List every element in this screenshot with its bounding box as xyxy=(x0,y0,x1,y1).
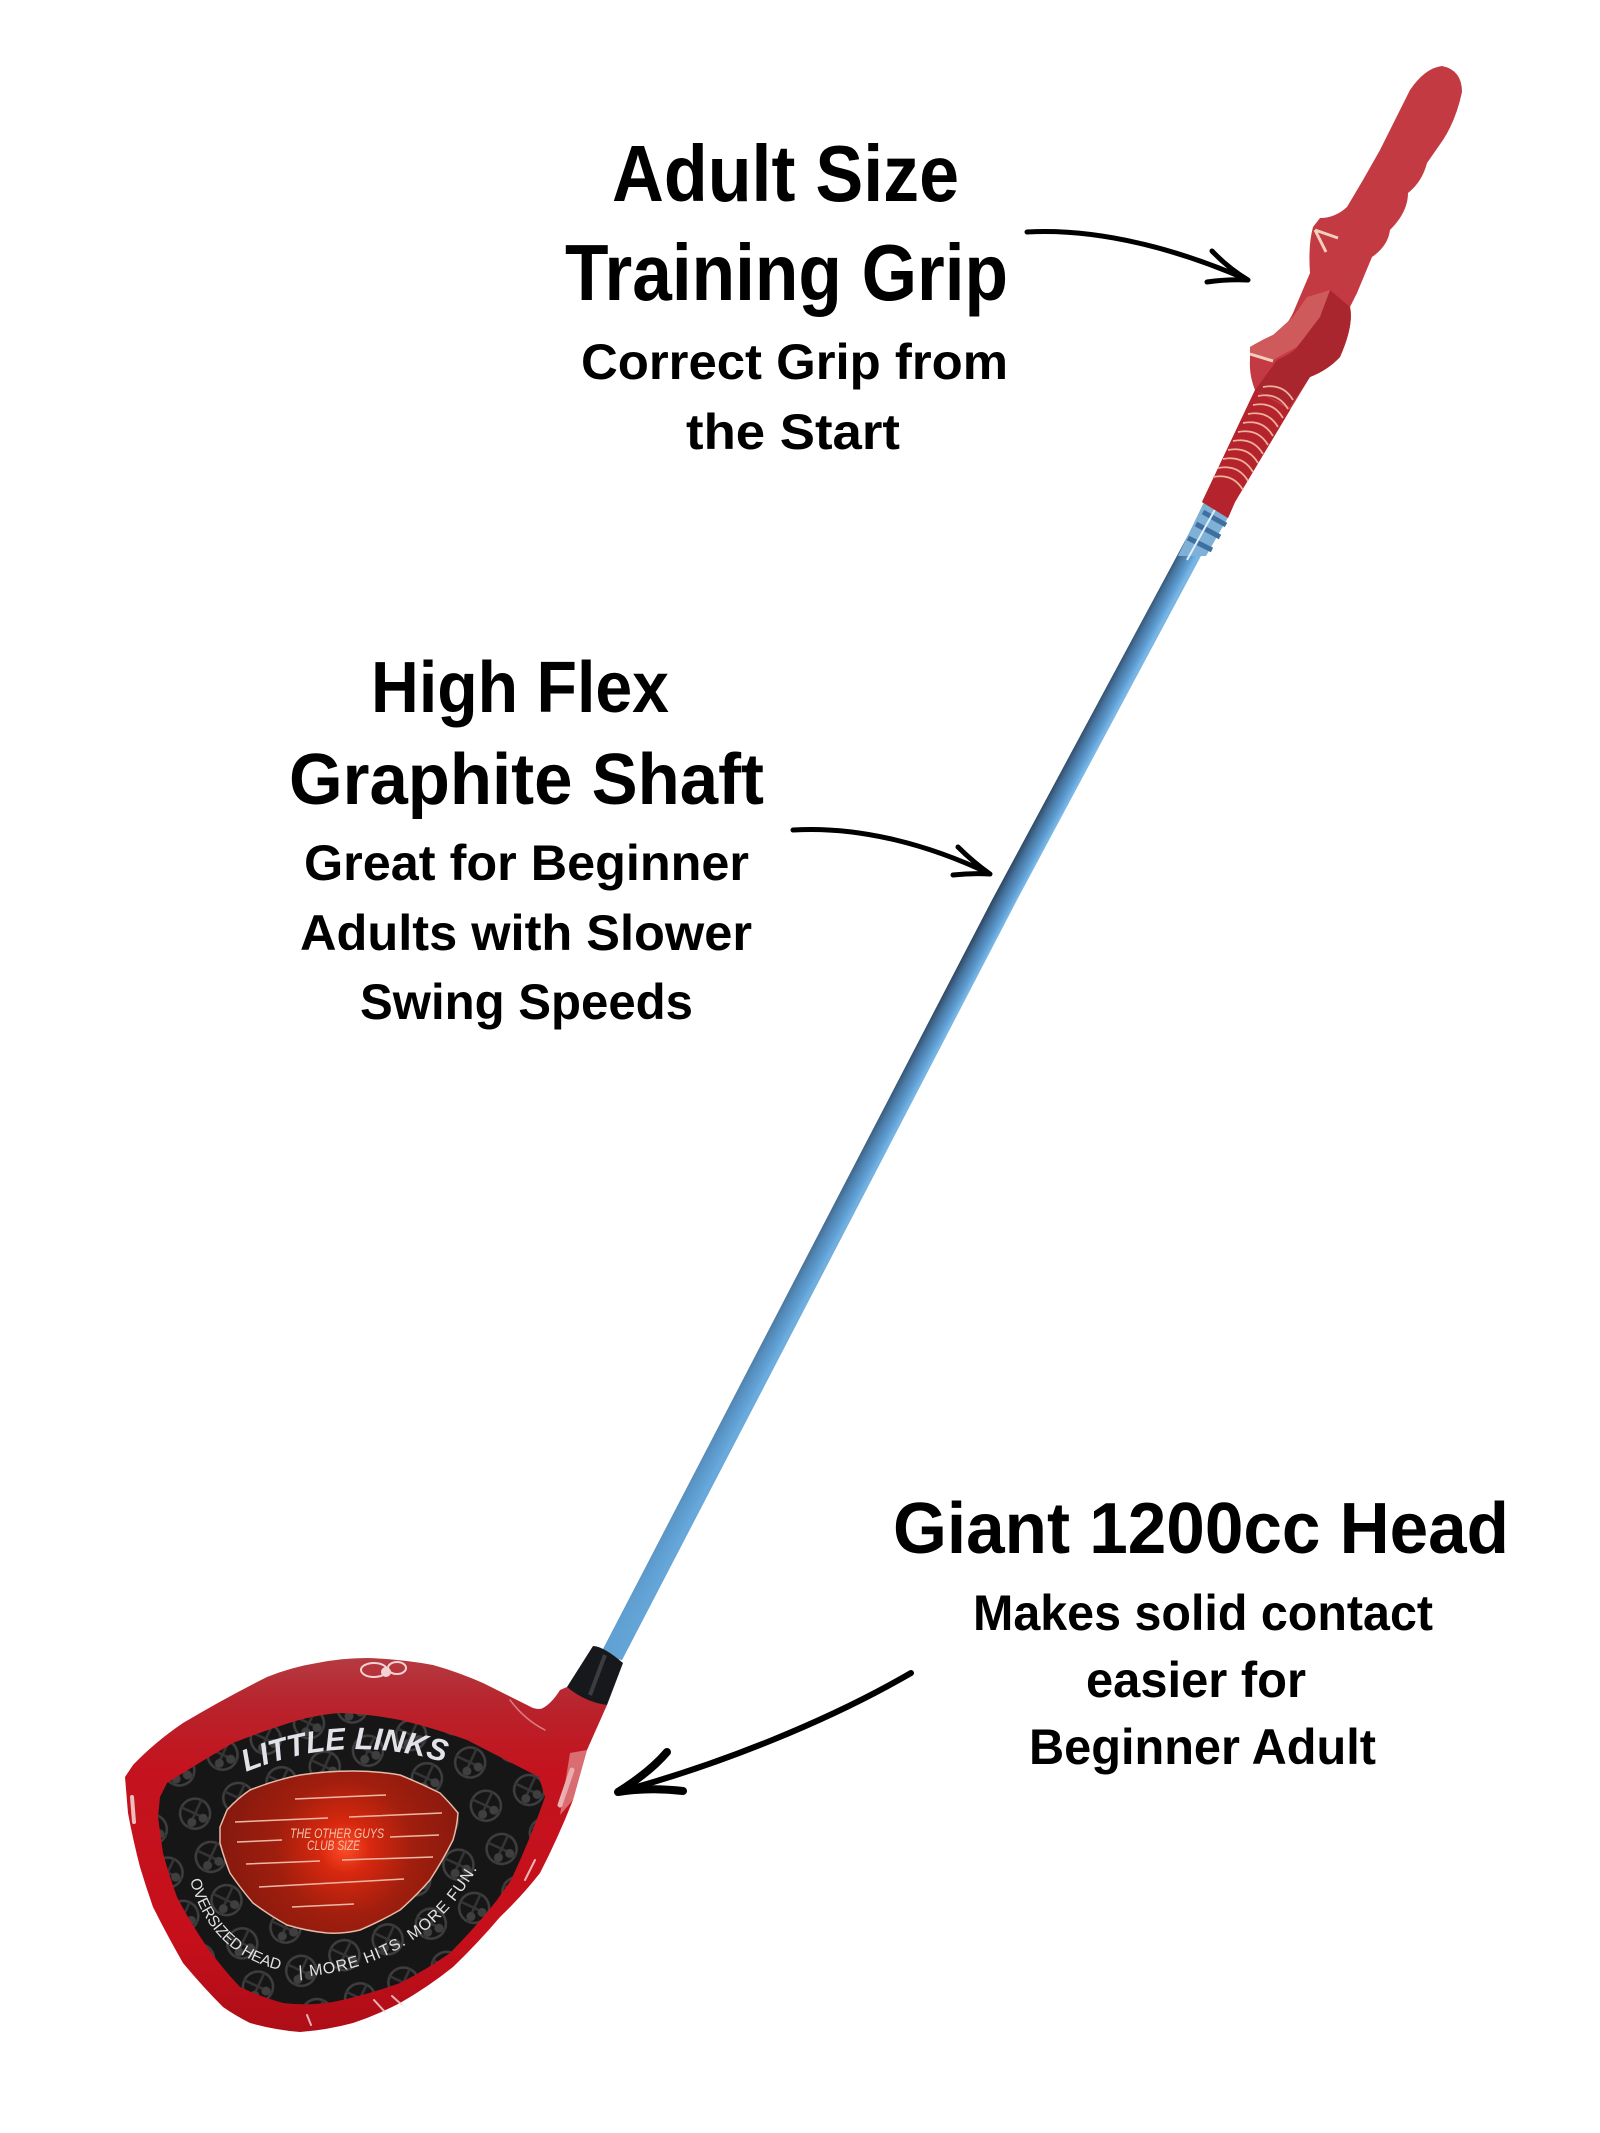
callout: Giant 1200cc Head: Makes solid contact xyxy=(973,1585,1433,1641)
callout: Adult Size Training Grip: Training Grip xyxy=(565,228,1008,317)
callout: Adult Size Training Grip: the Start xyxy=(686,404,900,460)
red window: CLUB SIZE xyxy=(307,1837,360,1853)
club head xyxy=(125,1658,607,2032)
callout: High Flex Graphite Shaft: Graphite Shaft xyxy=(289,740,764,820)
text: MORE HITS: | MORE HITS. MORE FUN. xyxy=(300,1868,476,1980)
callout: High Flex Graphite Shaft: High Flex xyxy=(371,648,669,728)
callout: Giant 1200cc Head: Giant 1200cc Head xyxy=(893,1489,1509,1569)
label panel xyxy=(158,1713,545,2004)
callout: Giant 1200cc Head xyxy=(893,1489,1509,1775)
hosel ferrule xyxy=(567,1646,623,1705)
arrow to shaft xyxy=(793,829,990,875)
icon: logo xyxy=(361,1662,406,1677)
training grip xyxy=(1202,66,1462,518)
arrow to head xyxy=(618,1673,911,1792)
callout: High Flex Graphite Shaft: Swing Speeds xyxy=(360,974,693,1030)
callout: High Flex Graphite Shaft: Great for Beginner xyxy=(304,835,749,891)
callout: Adult Size Training Grip: Correct Grip from xyxy=(581,334,1008,390)
pale neck highlight xyxy=(560,1750,587,1815)
text: OVERSIZED HEAD: OVERSIZED HEAD xyxy=(191,1878,281,1969)
text: LITTLE LINKS: LITTLE LINKS xyxy=(242,1728,449,1772)
arrowhead to head xyxy=(618,1752,683,1792)
plastic wrap highlights xyxy=(132,1700,572,2025)
red window xyxy=(220,1771,458,1933)
callout: Giant 1200cc Head: Beginner Adult xyxy=(1029,1719,1376,1775)
callout: Adult Size Training Grip xyxy=(565,129,1008,460)
red window: THE OTHER GUYS xyxy=(290,1825,384,1841)
arrow to grip xyxy=(1027,232,1248,282)
callout: High Flex Graphite Shaft xyxy=(289,648,764,1030)
shaft xyxy=(600,497,1232,1660)
callout: Adult Size Training Grip: Adult Size xyxy=(612,129,959,218)
golf club xyxy=(125,66,1462,2032)
callout: High Flex Graphite Shaft: Adults with Slower xyxy=(300,905,752,961)
callout: Giant 1200cc Head: easier for xyxy=(1086,1652,1306,1708)
